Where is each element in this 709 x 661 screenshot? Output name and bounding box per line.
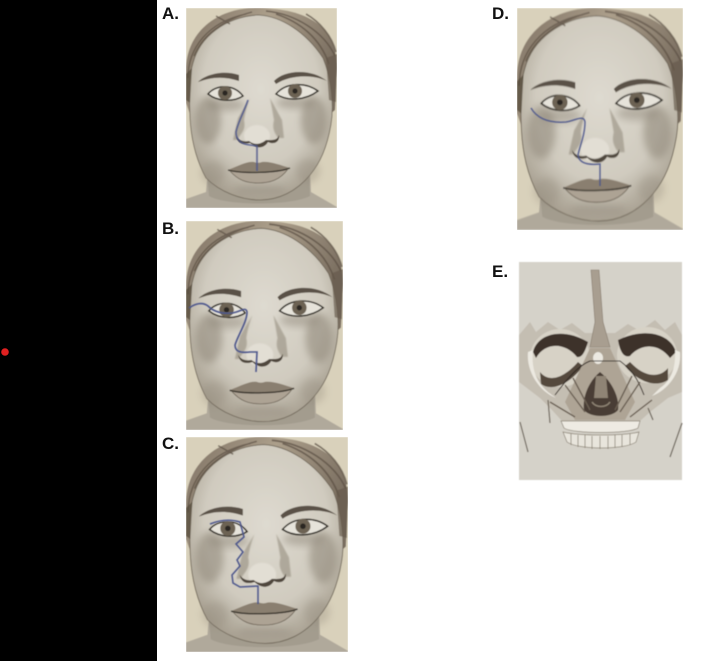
panel C bbox=[162, 434, 348, 652]
face illustration D bbox=[517, 8, 683, 230]
panel E bbox=[492, 262, 682, 480]
incision line C bbox=[210, 520, 258, 604]
face illustration C bbox=[186, 437, 348, 652]
panel B bbox=[162, 219, 343, 430]
skull illustration E bbox=[519, 262, 682, 480]
face illustration A bbox=[186, 8, 337, 208]
red marker dot bbox=[1, 348, 9, 356]
incision line D bbox=[531, 108, 600, 186]
panel D bbox=[492, 4, 683, 230]
label B: B. bbox=[162, 219, 179, 238]
incision line A bbox=[236, 100, 257, 171]
panel A bbox=[162, 4, 337, 208]
incision line B bbox=[189, 304, 257, 372]
label C: C. bbox=[162, 434, 179, 453]
black side panel bbox=[0, 0, 157, 661]
label E: E. bbox=[492, 262, 508, 281]
label A: A. bbox=[162, 4, 179, 23]
face illustration B bbox=[186, 221, 343, 430]
label D: D. bbox=[492, 4, 509, 23]
